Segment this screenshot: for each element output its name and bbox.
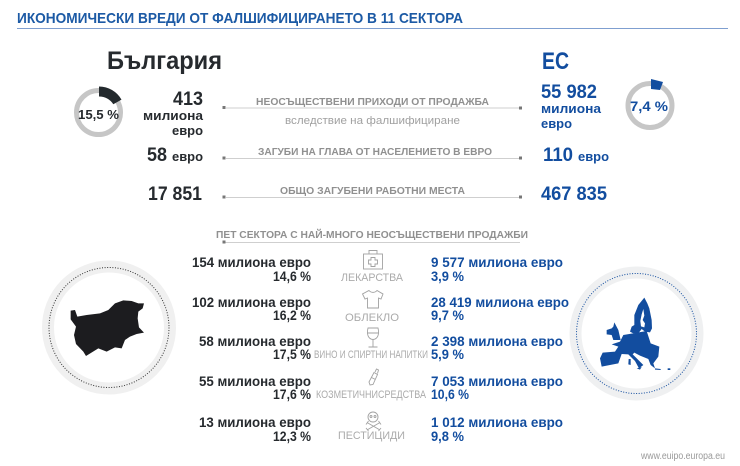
heading: Bulgaria: България	[107, 47, 222, 75]
Bulgaria value: 55 милиона евро	[199, 374, 311, 389]
source url: www.euipo.europa.eu	[640, 451, 725, 462]
Bulgaria value: 154 милиона евро	[192, 255, 311, 270]
section heading: top five sectors: ПЕТ СЕКТОРА С НАЙ-МНОГО НЕОСЪЩЕСТВЕНИ ПРОДАЖБИ	[216, 228, 528, 241]
Bulgaria value: 14,6 %	[273, 269, 311, 284]
Bulgaria value: 17,6 %	[273, 387, 311, 402]
EU value: 3,9 %	[431, 269, 464, 284]
connector: per capita: ЗАГУБИ НА ГЛАВА ОТ НАСЕЛЕНИЕТО В ЕВРО	[258, 146, 492, 158]
row: pesticides	[199, 412, 563, 444]
row: clothing	[192, 290, 569, 324]
EU value: 9 577 милиона евро	[431, 255, 563, 270]
Bulgaria value: 17,5 %	[273, 347, 311, 362]
Bulgaria per capita figure: 58	[147, 145, 167, 166]
label: КОЗМЕТИЧНИСРЕДСТВА	[316, 389, 427, 401]
connector: revenue: НЕОСЪЩЕСТВЕНИ ПРИХОДИ ОТ ПРОДАЖБА	[256, 96, 489, 108]
Bulgaria revenue figure: милиона	[143, 109, 204, 123]
EU jobs figure: 467 835	[541, 184, 607, 205]
donut: EU 7,4 %: 7,4 %	[630, 98, 669, 114]
EU value: 9,8 %	[431, 429, 464, 444]
connector: revenue: вследствие на фалшифициране	[285, 115, 460, 127]
icon: first aid kit	[364, 250, 382, 269]
EU revenue figure: евро	[541, 117, 572, 131]
map: EU	[600, 298, 670, 370]
EU revenue figure: милиона	[541, 102, 602, 116]
Bulgaria value: 13 милиона евро	[199, 415, 311, 430]
EU value	[431, 334, 563, 362]
EU value: 9,7 %	[431, 308, 464, 323]
EU value: 28 419 милиона евро	[431, 295, 569, 310]
EU revenue figure: 55 982	[541, 82, 597, 103]
label: ПЕСТИЦИДИ	[338, 430, 405, 442]
EU value	[431, 255, 563, 284]
row: wine and spirits	[199, 328, 563, 362]
Bulgaria revenue figure: евро	[172, 124, 203, 138]
EU value	[431, 415, 563, 444]
map: Bulgaria	[71, 300, 144, 356]
row: medicines	[192, 250, 563, 284]
Bulgaria map badge	[48, 266, 170, 388]
row: cosmetics	[199, 369, 563, 402]
icon: skull and crossbones	[366, 412, 381, 431]
heading: EU: ЕС	[542, 48, 569, 75]
EU map badge	[576, 272, 698, 394]
Bulgaria value: 16,2 %	[273, 308, 311, 323]
Bulgaria value: 102 милиона евро	[192, 295, 311, 310]
Bulgaria revenue figure	[143, 89, 204, 138]
Bulgaria value	[192, 255, 311, 284]
EU value: 10,6 %	[431, 387, 469, 402]
EU value: 5,9 %	[431, 347, 464, 362]
donut: Bulgaria 15,5 %: 15,5 %	[78, 107, 119, 122]
EU per capita figure: евро	[578, 150, 609, 164]
Bulgaria value	[199, 415, 311, 444]
connector: revenue	[222, 96, 522, 127]
icon: cosmetics bottle	[369, 369, 378, 385]
icon: wine glass	[367, 328, 379, 347]
label: ЛЕКАРСТВА	[341, 272, 404, 284]
Bulgaria value	[199, 334, 311, 362]
label: ОБЛЕКЛО	[345, 312, 399, 324]
Bulgaria per capita figure: евро	[172, 150, 203, 164]
EU value: 7 053 милиона евро	[431, 374, 563, 389]
label: ВИНО И СПИРТНИ НАПИТКИ	[314, 349, 428, 361]
Bulgaria value	[192, 295, 311, 323]
EU per capita figure: 110	[543, 145, 573, 166]
icon: t-shirt	[362, 290, 383, 308]
EU per capita figure	[543, 145, 609, 166]
EU value: 1 012 милиона евро	[431, 415, 563, 430]
Bulgaria per capita figure	[147, 145, 203, 166]
EU revenue figure	[541, 82, 602, 131]
connector: jobs: ОБЩО ЗАГУБЕНИ РАБОТНИ МЕСТА	[280, 185, 465, 197]
EU value: 2 398 милиона евро	[431, 334, 563, 349]
donut: EU 7,4 %	[628, 79, 672, 128]
EU value	[431, 374, 563, 402]
Bulgaria value: 12,3 %	[273, 429, 311, 444]
title: ИКОНОМИЧЕСКИ ВРЕДИ ОТ ФАЛШИФИЦИРАНЕТО В 11 СЕКТОРА	[17, 10, 463, 27]
Bulgaria revenue figure: 413	[173, 89, 203, 110]
Bulgaria value: 58 милиона евро	[199, 334, 311, 349]
donut: Bulgaria 15,5 %	[76, 86, 122, 134]
Bulgaria value	[199, 374, 311, 402]
Bulgaria jobs figure: 17 851	[148, 184, 202, 205]
EU value	[431, 295, 569, 323]
connector: jobs	[222, 185, 522, 198]
